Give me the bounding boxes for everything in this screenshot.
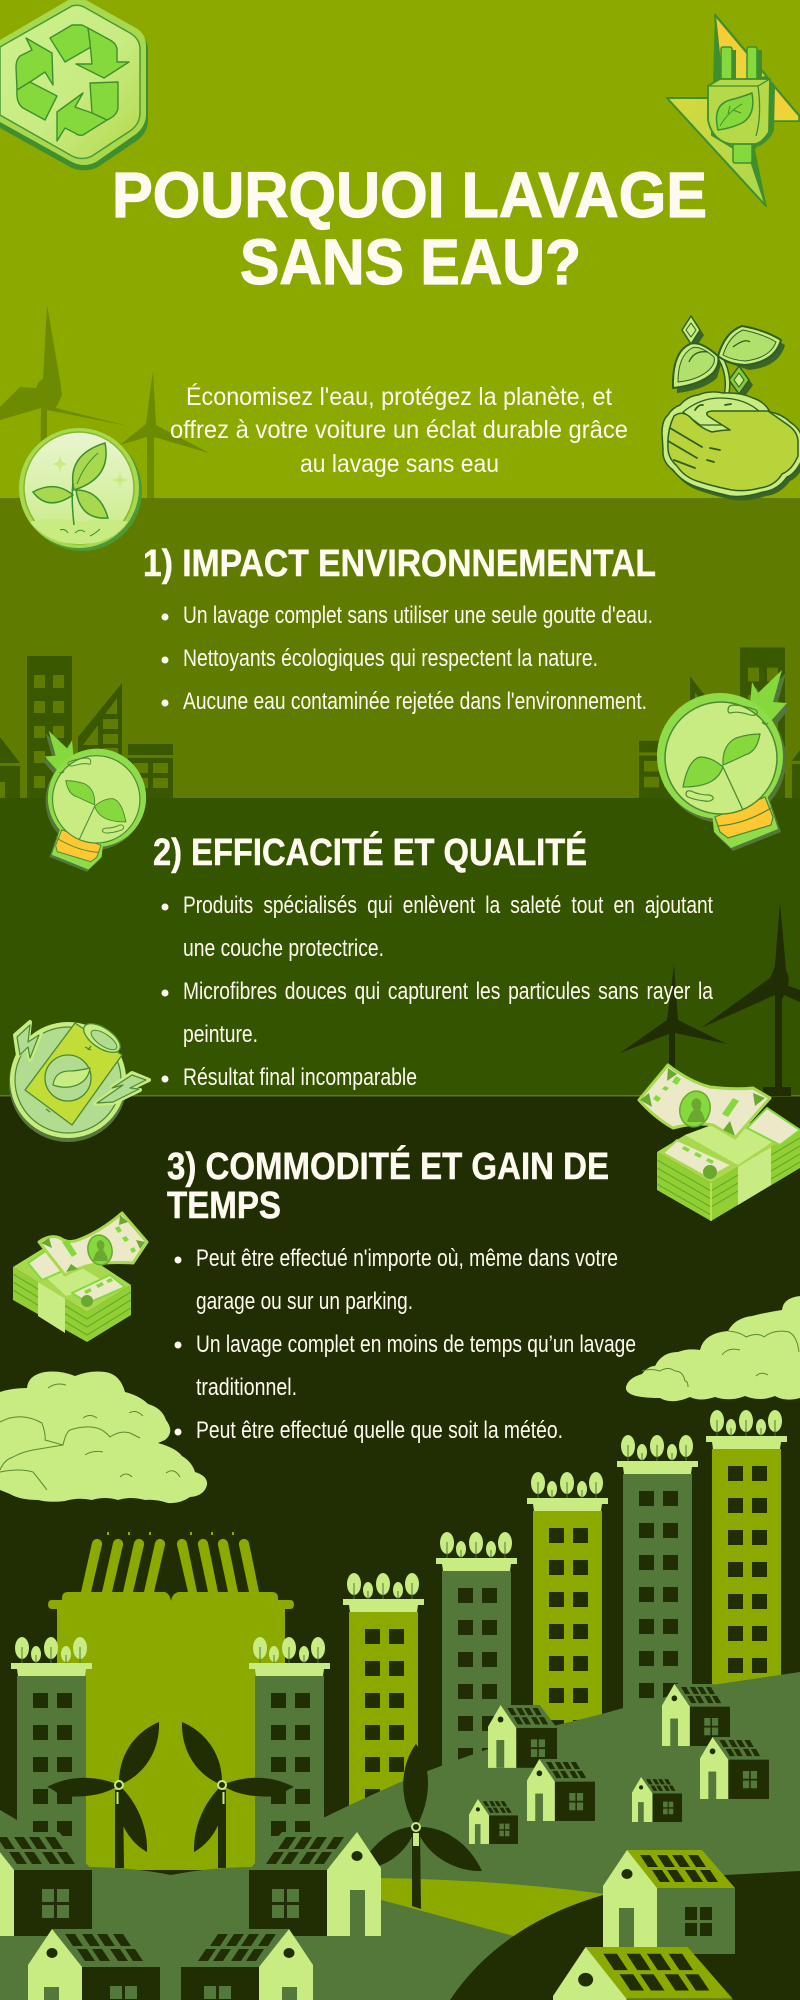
- list: section 3 last item: Peut être effectué quelle que soit la météo.: [196, 1417, 563, 1444]
- panel: section 2 background: [0, 798, 800, 1096]
- panel: intro background: [0, 0, 800, 498]
- intro text: offrez à votre voiture un éclat durable grâce: [170, 416, 628, 444]
- heading: section 3: [167, 1144, 609, 1227]
- houses: large left group: [0, 1832, 381, 2000]
- title: POURQUOI LAVAGE: [112, 159, 707, 231]
- wind turbines silhouette: section 2: [620, 902, 800, 1096]
- building: green 2: [436, 1532, 521, 1991]
- icon: left light bulb: [42, 731, 146, 872]
- list: section 3: Peut être effectué n'importe où, même dans votre: [196, 1245, 618, 1272]
- icon: eco battery: [9, 1018, 149, 1142]
- icon: recycling badge: [0, 0, 148, 170]
- title: SANS EAU?: [240, 226, 581, 298]
- list: section 3: Un lavage complet en moins de temps qu’un lavage: [196, 1331, 636, 1358]
- list: section 1: Aucune eau contaminée rejetée dans l'environnement.: [183, 688, 647, 715]
- icon: money stack right: [639, 1065, 800, 1221]
- icon: sprout in round badge: [19, 428, 142, 551]
- hills: olive: [381, 1878, 620, 1937]
- list: section 3: garage ou sur un parking.: [196, 1288, 413, 1315]
- wind turbine: centre: [360, 1744, 482, 1909]
- icon: money stack left: [13, 1213, 147, 1342]
- list: section 2: une couche protectrice.: [183, 935, 384, 962]
- list: section 2: peinture.: [183, 1021, 258, 1048]
- icon: right light bulb: [657, 670, 791, 851]
- icon: eco plug with lightning: [667, 13, 800, 208]
- city silhouette: section 1 left: [0, 656, 173, 798]
- heading: section 1: 1) IMPACT ENVIRONNEMENTAL: [143, 543, 656, 585]
- list: section 2: [162, 892, 714, 1091]
- hills: dark foreground: [450, 1871, 800, 2000]
- title: [112, 159, 707, 298]
- heading: section 2: 2) EFFICACITÉ ET QUALITÉ: [153, 830, 587, 874]
- list: section 2: Résultat final incomparable: [183, 1064, 417, 1091]
- building: olive 2: [527, 1472, 612, 1931]
- cloud left: [0, 1372, 207, 1503]
- wind turbines silhouette: intro: [0, 305, 209, 498]
- list: section 3: [174, 1245, 636, 1401]
- intro text: [170, 382, 628, 478]
- icon: plant held in hand: [662, 316, 800, 500]
- list: section 1: [162, 602, 653, 715]
- wind turbine: factory left: [47, 1722, 159, 1868]
- building: far left: [11, 1637, 96, 2000]
- heading: section 3: TEMPS: [167, 1185, 281, 1227]
- intro text: au lavage sans eau: [300, 450, 499, 478]
- wind turbine: factory right: [182, 1722, 294, 1868]
- city silhouette: section 1 right: [639, 647, 800, 798]
- houses: small on the hill: [469, 1684, 769, 1844]
- list: section 3: traditionnel.: [196, 1374, 297, 1401]
- illustration: factory: [48, 1532, 294, 1870]
- list: section 1: Un lavage complet sans utiliser une seule goutte d'eau.: [183, 602, 653, 629]
- houses: large right group: [553, 1850, 735, 2000]
- panel: section 1 background: [0, 498, 800, 798]
- panel: section 3 background: [0, 1096, 800, 2000]
- building: olive 3: [706, 1410, 791, 1869]
- building: second left: [249, 1637, 334, 2000]
- intro text: Économisez l'eau, protégez la planète, et: [186, 382, 612, 411]
- list: section 1: Nettoyants écologiques qui respectent la nature.: [183, 645, 598, 672]
- hills: main ground: [0, 1672, 800, 2000]
- building: olive 1: [343, 1573, 428, 2000]
- cloud right: [626, 1296, 800, 1401]
- heading: section 3: 3) COMMODITÉ ET GAIN DE: [167, 1144, 609, 1188]
- building: green 3: [617, 1435, 702, 1894]
